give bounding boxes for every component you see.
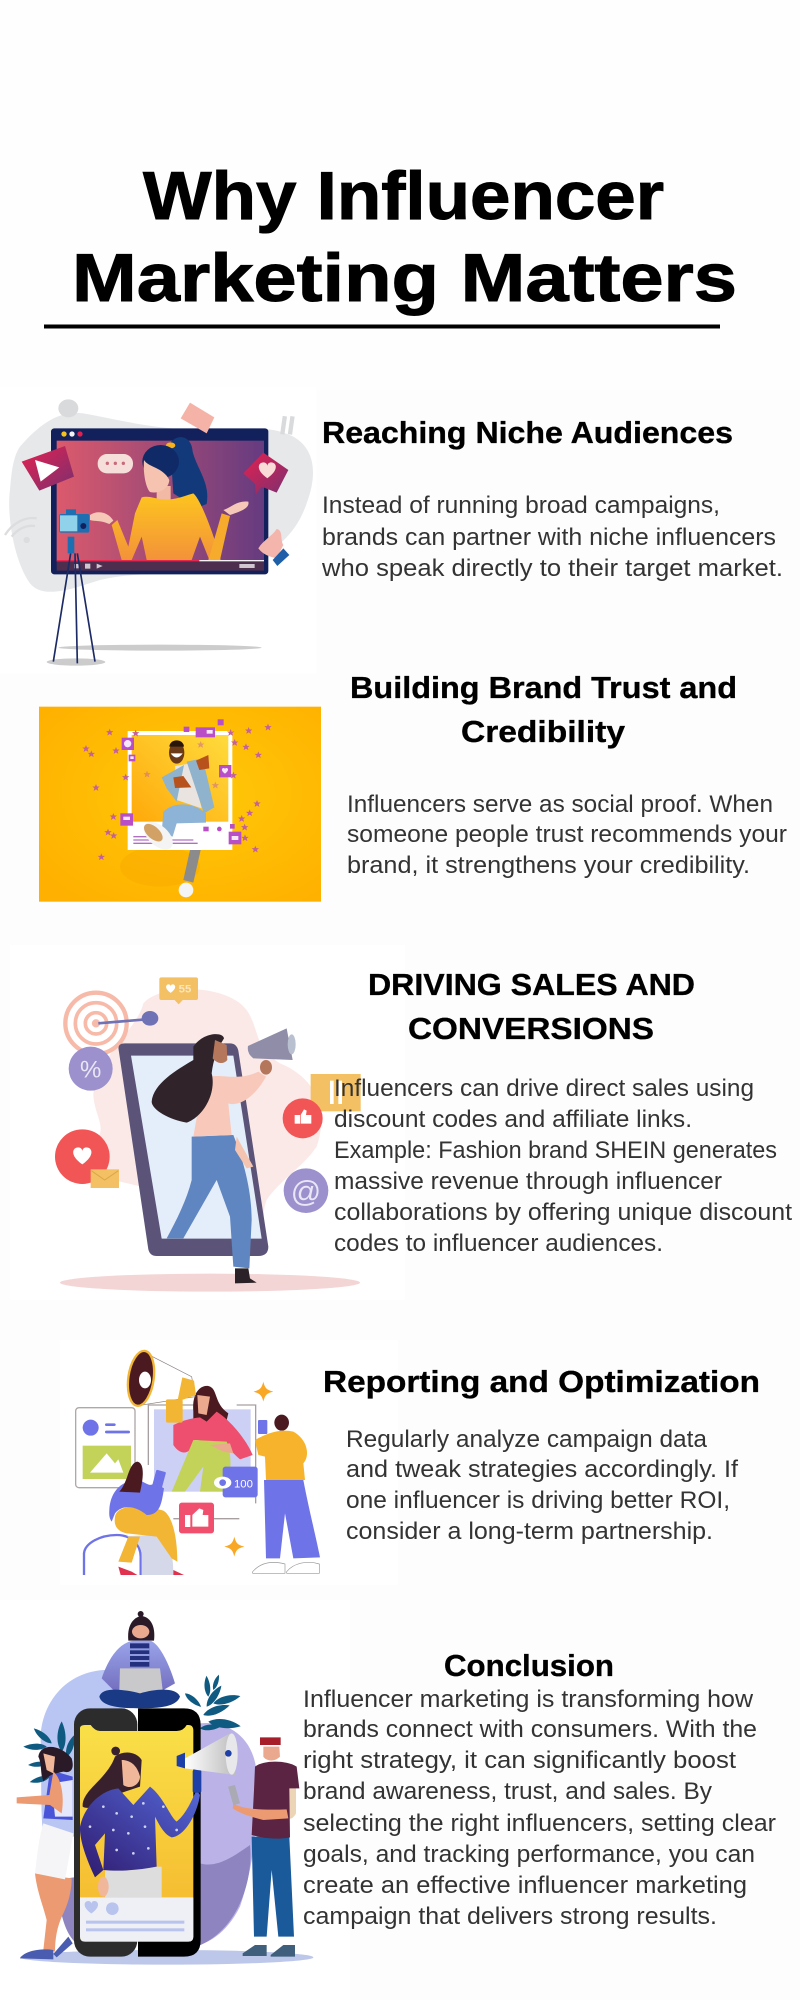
grey blob: [9, 413, 313, 592]
body: brand trust: someone people trust recommends your: [347, 821, 787, 848]
body: sales: discount codes and affiliate links.: [334, 1106, 692, 1133]
body: conclusion: right strategy, it can significantly boost: [303, 1747, 736, 1774]
heading: Reaching Niche Audiences: Reaching Niche Audiences: [322, 415, 733, 450]
body: niche audiences: brands can partner with niche influencers: [322, 524, 776, 551]
percent badge: %: [80, 1056, 101, 1083]
phone: [118, 1043, 268, 1256]
heading: Building Brand Trust and Credibility: Building Brand Trust and: [350, 670, 737, 705]
body: brand trust: [347, 791, 787, 879]
envelope: [181, 403, 214, 433]
body: sales: codes to influencer audiences.: [334, 1230, 663, 1257]
seated woman: [84, 1462, 184, 1575]
person with laptop on top: [99, 1611, 180, 1708]
body: conclusion: brands connect with consumers. With the: [303, 1716, 757, 1743]
body: conclusion: Influencer marketing is transforming how: [303, 1686, 754, 1713]
man with phone on right: [228, 1737, 299, 1957]
percent badge: [69, 1047, 113, 1091]
body: reporting: [346, 1426, 738, 1545]
like count tag: [159, 977, 198, 1004]
thumbs badge: [283, 1098, 323, 1138]
heading: Driving Sales and Conversions: [368, 967, 695, 1046]
body: sales: Example: Fashion brand SHEIN generates: [334, 1137, 777, 1164]
body: reporting: and tweak strategies accordingly. If: [346, 1456, 738, 1483]
like count tag: 55: [179, 984, 191, 996]
at badge: [284, 1168, 328, 1213]
woman with phone on left: [17, 1747, 73, 1959]
influencer woman: [172, 1386, 253, 1492]
view count tag: [214, 1467, 258, 1497]
body: conclusion: campaign that delivers strong results.: [303, 1903, 717, 1930]
heart tag: [243, 453, 288, 494]
megaphone: [125, 1349, 196, 1423]
heading: Building Brand Trust and Credibility: Credibility: [461, 714, 626, 749]
body: sales: [334, 1075, 792, 1257]
chat bubble: [98, 454, 133, 473]
body: niche audiences: [321, 492, 783, 582]
heading: Conclusion: Conclusion: [444, 1648, 614, 1683]
floor shadow: [20, 1950, 313, 1965]
photo frame: [128, 731, 232, 850]
title: [72, 158, 737, 316]
body: conclusion: selecting the right influencers, setting clear: [303, 1810, 776, 1837]
leaves: [23, 1674, 241, 1785]
heading: Driving Sales and Conversions: DRIVING SALES AND: [368, 967, 695, 1002]
illustration: team with megaphone and social post: [76, 1349, 320, 1575]
title underline: [44, 324, 720, 328]
body: conclusion: [303, 1686, 776, 1930]
envelope: [91, 1169, 119, 1188]
play button tag: [22, 446, 74, 491]
body: sales: Influencers can drive direct sales using: [334, 1075, 754, 1102]
body: brand trust: brand, it strengthens your credibility.: [347, 852, 750, 879]
body: niche audiences: Instead of running broad campaigns,: [322, 492, 720, 519]
body: reporting: one influencer is driving better ROI,: [346, 1487, 730, 1514]
thumbs up: [258, 529, 289, 566]
pink background blob: [93, 989, 321, 1217]
phone: [74, 1708, 201, 1957]
body: reporting: Regularly analyze campaign data: [346, 1426, 708, 1453]
body: conclusion: create an effective influencer marketing: [303, 1872, 747, 1899]
heart badge: [55, 1129, 110, 1184]
player control bar: [57, 561, 264, 571]
body: reporting: consider a long-term partnership.: [346, 1518, 713, 1545]
bell and pause marks: [58, 399, 295, 435]
wifi arcs: [5, 518, 37, 542]
title: Marketing Matters: [72, 240, 737, 316]
man figure: [139, 740, 214, 897]
woman presenter: [90, 437, 249, 560]
body: sales: massive revenue through influencer: [334, 1168, 722, 1195]
body: conclusion: brand awareness, trust, and sales. By: [303, 1778, 712, 1805]
megaphone: [177, 1733, 238, 1793]
floor shadow: [60, 1274, 360, 1292]
body: conclusion: goals, and tracking performance, you can: [303, 1841, 755, 1868]
heading: Building Brand Trust and Credibility: [350, 670, 737, 749]
body: sales: collaborations by offering unique discount: [334, 1199, 792, 1226]
video window: [51, 428, 268, 574]
social badges: [120, 719, 241, 844]
illustration: conclusion phone with influencers: [17, 1611, 313, 1965]
body: niche audiences: who speak directly to their target market.: [321, 555, 783, 582]
target: [65, 993, 127, 1054]
view count tag: 100: [234, 1478, 253, 1490]
at badge: @: [291, 1175, 321, 1208]
like tag: [173, 1503, 239, 1533]
heading: Reporting and Optimization: Reporting and Optimization: [323, 1364, 760, 1399]
post frame: [148, 1405, 256, 1503]
content card: [76, 1408, 135, 1488]
body: brand trust: Influencers serve as social proof. When: [347, 791, 773, 818]
sparkles: [224, 1382, 273, 1557]
background circles: [41, 1670, 257, 1947]
camera on tripod: [53, 509, 95, 663]
dart: [98, 1011, 158, 1026]
illustration: video influencer on screen: [0, 387, 317, 673]
ground shadows: [58, 645, 262, 651]
illustration: man in photo frame on yellow: [39, 707, 321, 902]
standing man: [253, 1415, 320, 1573]
star cloud: [82, 724, 272, 860]
title: Why Influencer: [143, 158, 664, 234]
heading: Driving Sales and Conversions: CONVERSIONS: [408, 1011, 654, 1046]
illustration: woman with megaphone stepping out of phone: [55, 977, 361, 1292]
yellow chat tag: [311, 1074, 361, 1111]
woman on phone screen: [80, 1747, 200, 1897]
woman with megaphone: [152, 1028, 296, 1283]
